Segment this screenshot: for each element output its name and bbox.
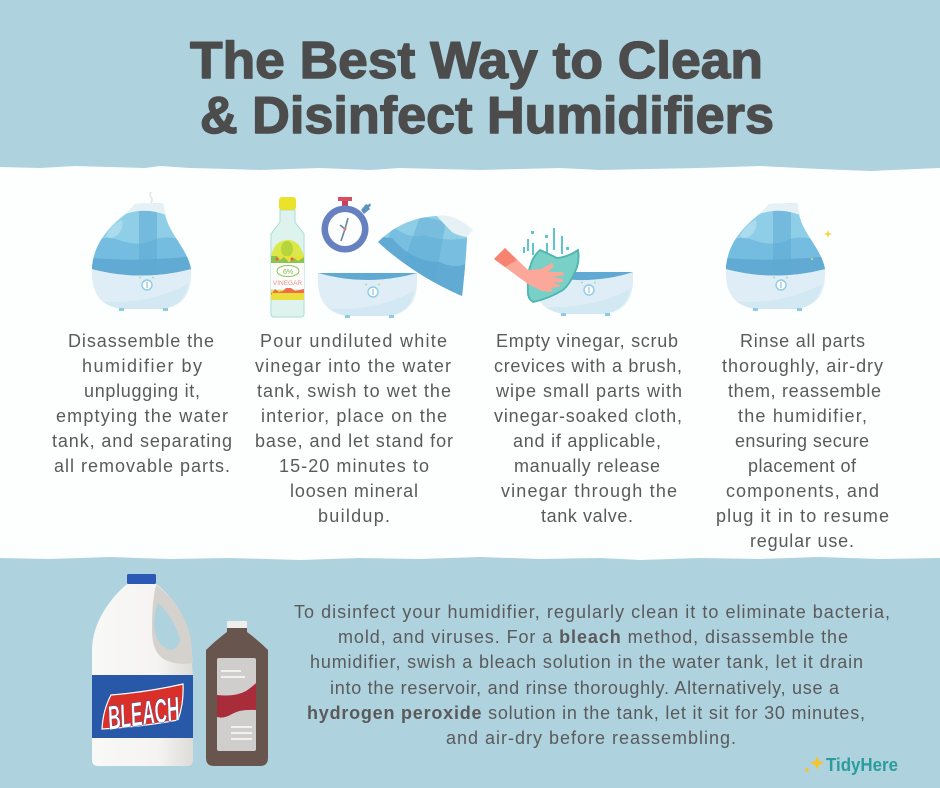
step 4 text: [716, 331, 889, 551]
step 3 text: Empty vinegar, scrub: [496, 331, 678, 351]
step 4 text: the humidifier,: [738, 406, 867, 426]
title: & Disinfect Humidifiers: [200, 87, 774, 145]
title: The Best Way to Clean: [190, 32, 763, 90]
step 4 text: plug it in to resume: [716, 506, 889, 526]
step 2 text: Pour undiluted white: [260, 331, 447, 351]
step 2 icon: vinegar bottle: 6%: [283, 269, 293, 276]
disinfecting paragraph: mold, and viruses. For a bleach method, disassemble the: [338, 627, 848, 647]
disinfecting paragraph: humidifier, swish a bleach solution in the water tank, let it drain: [310, 652, 863, 672]
step 2 icon: stopwatch: [322, 197, 371, 252]
icon: hydrogen peroxide bottle: [206, 621, 268, 766]
step 4 text: thoroughly, air-dry: [722, 356, 883, 376]
title: [190, 32, 774, 145]
step 2 text: tank, swish to wet the: [257, 381, 451, 401]
step 1 text: unplugging it,: [84, 381, 200, 401]
step 4 text: them, reassemble: [728, 381, 881, 401]
step 1 text: [52, 331, 232, 476]
step 1 text: emptying the water: [56, 406, 228, 426]
step 4 text: placement of: [748, 456, 857, 476]
disinfecting paragraph: into the reservoir, and rinse thoroughly. Alternatively, use a: [330, 678, 840, 698]
disinfecting paragraph: and air-dry before reassembling.: [446, 728, 736, 748]
step 2 text: loosen mineral: [290, 481, 418, 501]
disinfecting paragraph: hydrogen peroxide solution in the tank, let it sit for 30 minutes,: [307, 703, 865, 723]
step 3 text: vinegar through the: [501, 481, 677, 501]
step 2 text: 15-20 minutes to: [279, 456, 429, 476]
step 3 text: [494, 331, 682, 526]
step 2 text: [255, 331, 453, 526]
step 3 text: vinegar-soaked cloth,: [494, 406, 682, 426]
step 3 text: manually release: [514, 456, 660, 476]
step 4 text: Rinse all parts: [740, 331, 865, 351]
step 2 text: buildup.: [318, 506, 390, 526]
TidyHere logo: TidyHere: [826, 754, 898, 775]
step 3 text: tank valve.: [541, 506, 633, 526]
forearm and hand: [494, 248, 564, 292]
step 2 icon: humidifier base and tilted tank: [318, 210, 475, 318]
icon: bleach jug: [92, 574, 193, 766]
step 2 text: interior, place on the: [261, 406, 447, 426]
disinfecting paragraph: To disinfect your humidifier, regularly clean it to eliminate bacteria,: [294, 602, 890, 622]
step 1 text: tank, and separating: [52, 431, 232, 451]
step 4 text: components, and: [726, 481, 879, 501]
icon: bleach jug: BLEACH: [105, 690, 183, 738]
step 3 text: wipe small parts with: [495, 381, 682, 401]
step 3 text: crevices with a brush,: [494, 356, 682, 376]
disinfecting paragraph: [294, 602, 890, 748]
step 2 text: vinegar into the water: [255, 356, 451, 376]
step 1 text: Disassemble the: [68, 331, 214, 351]
step 1 icon: humidifier: [88, 192, 196, 311]
step 1 text: all removable parts.: [54, 456, 230, 476]
step 4 text: regular use.: [750, 531, 854, 551]
panel: white torn-paper steps band: [0, 166, 940, 560]
step 3 text: and if applicable,: [513, 431, 661, 451]
step 1 text: humidifier by: [82, 356, 202, 376]
teal cloth: [528, 250, 579, 302]
step 4 text: ensuring secure: [735, 431, 869, 451]
step 2 icon: vinegar bottle: [271, 197, 304, 317]
step 4 icon: clean humidifier with sparkle: [722, 200, 832, 311]
step 2 text: base, and let stand for: [255, 431, 453, 451]
step 3 icon: hand wiping base with cloth: [494, 228, 633, 316]
step 2 icon: vinegar bottle: VINEGAR: [273, 280, 302, 287]
